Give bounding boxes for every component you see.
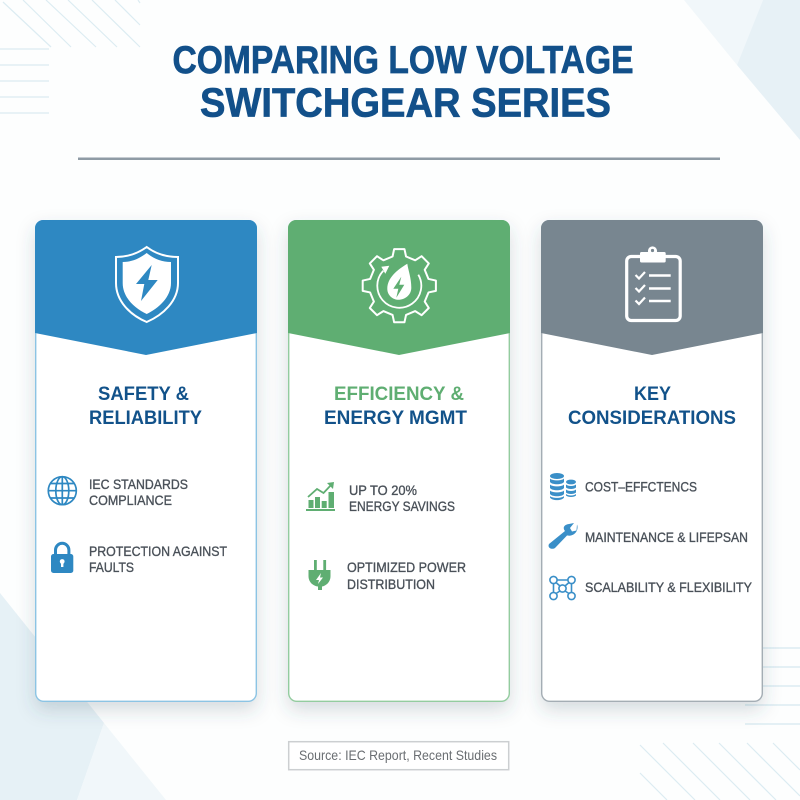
card body [542, 221, 762, 701]
icon: coin stacks [550, 473, 576, 500]
source note [289, 742, 509, 770]
item: energy savings: ENERGY SAVINGS [349, 498, 455, 514]
item: cost efficiency [550, 473, 697, 500]
heading: KEY [634, 384, 671, 405]
item: maintenance and lifespan: MAINTENANCE & LIFEPSAN [585, 529, 748, 545]
icon: connected nodes [550, 576, 575, 600]
panel: efficiency and energy management [288, 220, 510, 701]
item: IEC standards: IEC STANDARDS [89, 476, 188, 492]
card header [541, 220, 763, 355]
icon: wrench [549, 523, 578, 549]
card header [35, 220, 257, 355]
item: power distribution [308, 559, 466, 592]
heading [568, 384, 736, 429]
card header [288, 220, 510, 355]
item: power distribution: DISTRIBUTION [347, 576, 435, 592]
item: cost efficiency: COST–EFFCTENCS [585, 478, 697, 494]
heading [324, 384, 467, 429]
item: protection against faults [51, 543, 227, 575]
card body [36, 221, 256, 701]
icon: growth chart [306, 482, 335, 510]
item: scalability and flexibility [550, 576, 753, 600]
title: COMPARING LOW VOLTAGE [172, 39, 634, 82]
item: maintenance and lifespan [549, 523, 748, 549]
icon: padlock [51, 543, 73, 573]
panel: key considerations [541, 220, 763, 701]
icon: shield with lightning bolt [116, 247, 178, 322]
icon: plug [308, 560, 330, 590]
title: SWITCHGEAR SERIES [200, 80, 611, 126]
heading: CONSIDERATIONS [568, 408, 736, 429]
item: power distribution: OPTIMIZED POWER [347, 559, 466, 575]
title divider [78, 158, 720, 160]
item: scalability and flexibility: SCALABILITY & FLEXIBILITY [585, 579, 753, 595]
heading: RELIABILITY [89, 408, 202, 429]
item: IEC standards [48, 476, 188, 508]
heading: ENERGY MGMT [324, 408, 467, 429]
item: protection against faults: PROTECTION AGAINST [89, 543, 227, 559]
heading: SAFETY & [98, 384, 189, 405]
item: protection against faults: FAULTS [89, 559, 134, 575]
panel: safety and reliability [35, 220, 257, 701]
source note: Source: IEC Report, Recent Studies [299, 747, 497, 763]
heading [89, 384, 202, 429]
card body [289, 221, 509, 701]
heading: EFFICIENCY & [334, 384, 464, 405]
icon: globe [48, 477, 76, 505]
icon: gear with leaf [363, 249, 436, 322]
item: IEC standards: COMPLIANCE [89, 492, 172, 508]
title [172, 39, 634, 126]
icon: clipboard checklist [627, 246, 680, 320]
item: energy savings [306, 482, 455, 514]
item: energy savings: UP TO 20% [349, 482, 417, 498]
